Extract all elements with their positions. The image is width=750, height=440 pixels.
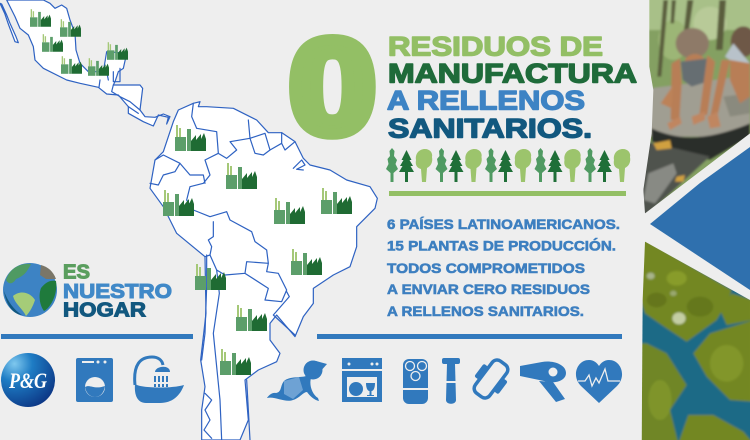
- heading: [387, 32, 637, 144]
- heading: MANUFACTURA: [388, 58, 637, 88]
- icon: electric shaver: [403, 359, 428, 404]
- photo: children at a stream: [640, 0, 750, 220]
- heading: SANITARIOS.: [388, 114, 592, 144]
- icon: sanitary pad: [467, 354, 515, 404]
- logo wordmark: ES: [63, 260, 90, 284]
- globe: [3, 263, 57, 317]
- icons: product categories: [76, 354, 622, 404]
- blue triangle: [650, 147, 750, 290]
- logo wordmark: [63, 260, 172, 322]
- row of trees: [386, 148, 630, 182]
- heading: RESIDUOS DE: [388, 32, 603, 62]
- child left: [661, 28, 715, 130]
- photo: mangrove river: [637, 237, 750, 440]
- body text: TODOS COMPROMETIDOS: [387, 260, 585, 276]
- icon: razor: [442, 358, 460, 404]
- body text: A ENVIAR CERO RESIDUOS: [387, 281, 590, 297]
- map: Mexico and Central America: [0, 0, 170, 126]
- child right: [707, 26, 750, 128]
- body text: A RELLENOS SANITARIOS.: [387, 303, 584, 319]
- factories on the map: [30, 9, 352, 375]
- map: South America: [150, 102, 377, 440]
- logo wordmark: NUESTRO: [63, 280, 172, 303]
- logo: Es Nuestro Hogar: [3, 260, 172, 322]
- icon: crawling baby: [267, 360, 327, 401]
- heading: A RELLENOS: [387, 86, 585, 116]
- green divider: [389, 191, 626, 196]
- body text: 15 PLANTAS DE PRODUCCIÓN.: [387, 236, 616, 254]
- icon: heart with pulse: [576, 360, 622, 403]
- blue dividers: [1, 334, 622, 339]
- icon: hair dryer: [520, 361, 566, 402]
- body text: 6 PAÍSES LATINOAMERICANOS.: [387, 216, 620, 232]
- logo: P&G: [1, 353, 55, 407]
- big zero: 0: [289, 12, 376, 162]
- icon: dishwasher: [342, 358, 382, 402]
- icon: washing machine: [76, 358, 113, 402]
- logo: P&G: P&G: [8, 368, 47, 393]
- body text: [387, 216, 620, 319]
- logo wordmark: HOGAR: [63, 298, 146, 322]
- icon: bathtub and shower: [135, 357, 184, 403]
